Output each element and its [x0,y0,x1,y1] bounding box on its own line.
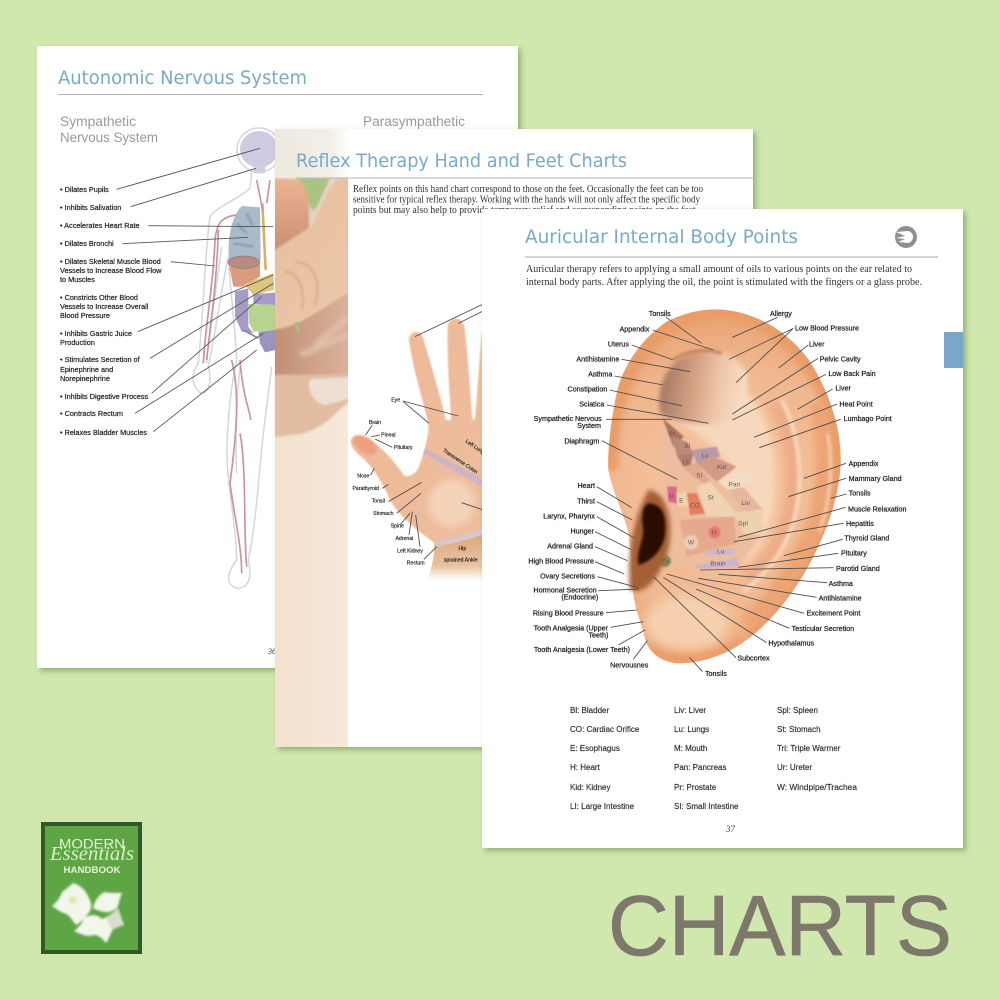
zone labels: Kid [717,464,727,471]
icon: hand in circle [895,226,917,248]
hand labels: Pituitary [394,445,413,451]
ear labels left: Sympathetic Nervous [534,415,602,423]
ear labels right: Liver [835,385,851,393]
lobe lower-edge shade [652,640,743,659]
logo: Modern Essentials Handbook [41,822,142,954]
thumb nail edge [296,322,299,332]
rim band [611,311,838,637]
ear labels right: Mammary Gland [849,475,902,483]
spine [262,203,266,270]
intestines [248,304,275,332]
zone labels: Liv [741,500,751,507]
wrist band [435,523,488,547]
palm highlight [428,480,475,527]
tab: blue section marker [944,332,963,368]
ear labels left: (Endocrine) [561,594,598,602]
arteries and veins [203,180,270,573]
ear shading, clipped to silhouette [611,311,838,659]
legend: abbreviations: H: Heart [570,763,601,772]
legend: abbreviations: Ur: Ureter [777,763,812,772]
panel: Autonomic Nervous System page [37,46,518,668]
body outline [193,128,281,588]
zone labels: SI [696,473,703,480]
legend: abbreviations: Kid: Kidney [570,783,610,792]
legend: abbreviations: Tri: Triple Warmer [777,744,841,753]
callout lines [366,302,488,559]
transverse colon band [423,448,488,490]
stomach [253,293,275,305]
text: sympathetic effects list: to Muscles [60,275,95,284]
text: sympathetic effects list: • Contracts Rectum [60,409,123,418]
subheading: Sympathetic Nervous System [60,114,158,145]
hand labels: sprained Ankle [444,558,478,564]
zone labels: Brain [710,561,726,568]
text: sympathetic effects list: Vessels to Increase Overall [60,302,149,311]
hand labels: Transverse Colon [442,448,479,476]
ear labels right: Pituitary [841,550,867,558]
hand labels: Stomach [373,511,394,517]
zone labels: H [712,529,717,536]
lungs [229,206,261,267]
logo text [49,836,134,875]
page number: 36 [267,647,276,656]
ear labels right: Lumbago Point [844,415,892,423]
hand labels: Brain [369,420,381,426]
zone labels: Bl [684,443,691,450]
ear labels right: Muscle Relaxation [848,505,906,513]
ear labels right: Allergy [770,310,792,318]
illustration: ear chart [528,309,906,678]
legend: abbreviations: M: Mouth [674,744,707,753]
photo strip: thumb pressing hand [265,129,360,747]
text: reflex intro: sensitive for typical reflex therapy. Working with the hands will not only affect the specific body [353,194,700,206]
hand silhouette [351,319,488,557]
subheading: Parasympathetic: Parasympathetic [363,114,465,129]
text: sympathetic effects list: Norepinephrine [60,374,110,383]
zone labels: Pan [728,481,741,488]
ear labels left: Heart [577,482,595,490]
ear labels right: Asthma [829,580,853,588]
hand labels: Left Lung [464,439,485,456]
hand labels: Left Kidney [397,548,423,554]
ear labels left: Larynx, Pharynx [543,512,595,520]
ear labels left: Teeth) [588,631,608,639]
ear labels right: Pelvic Cavity [820,355,861,363]
panel: Auricular Internal Body Points page [482,209,963,848]
thumb [265,178,352,330]
text: sympathetic effects list: Blood Pressure [60,311,110,320]
ear labels left [528,310,671,670]
ear labels right: Testicular Secretion [792,625,854,633]
zone labels: Pr [668,431,676,438]
hand labels [352,398,485,566]
heading: Reflex Therapy Hand and Feet Charts: Reflex Therapy Hand and Feet Charts [296,150,627,172]
liver [229,265,260,287]
hand labels: Nose [357,474,369,480]
text: sympathetic effects list: • Dilates Skeletal Muscle Blood [60,257,161,266]
rear finger [265,178,309,262]
shaded gap under thumb [265,270,360,395]
text: sympathetic effects list: Vessels to Increase Blood Flow [60,266,162,275]
legend: abbreviations: LI: Large Intestine [570,802,635,811]
ear labels left: Tonsils [649,310,671,318]
legend: abbreviations: W: Windpipe/Trachea [777,783,858,792]
subheading: Sympathetic Nervous System: Nervous System [60,130,158,145]
backdrop behind thumb [265,178,355,288]
ear labels left: Hormonal Secretion [533,587,597,595]
ear labels left: System [577,422,601,430]
thumb tip blush [350,431,380,459]
ear labels left: Adrenal Gland [547,543,593,551]
ear labels right: Appendix [849,460,879,468]
ear labels right [705,310,906,678]
ear labels right: Thyroid Gland [844,535,889,543]
text: sympathetic effects list: • Dilates Pupils [60,185,109,194]
page number: 37 [725,824,736,834]
bladder [258,330,275,352]
ear labels left: Hunger [571,527,595,535]
ear labels left: Ovary Secretions [540,572,595,580]
hand labels: Parathyroid [352,486,379,492]
legend: abbreviations: Pr: Prostate [674,783,717,792]
text: sympathetic effects list: Production [60,338,95,347]
ear labels right: Tonsils [705,670,727,678]
ear labels left: Uterus [608,341,629,349]
ear labels right: Low Blood Pressure [795,325,859,333]
legend: abbreviations: St: Stomach [777,725,821,734]
illustration: human body anatomy [193,128,281,588]
text: auricular intro [526,263,922,288]
ear labels left: Diaphragm [564,438,599,446]
text: auricular intro: internal body parts. After applying the oil, the point is stimulated with the fingers or a glass probe. [526,276,922,288]
diaphragm [228,256,260,269]
ear labels right: Excitement Point [807,609,860,617]
zone labels: Lv [701,452,709,459]
zone labels: M [669,494,674,501]
ear labels left: Asthma [588,371,612,379]
text: sympathetic effects list: • Stimulates Secretion of [60,355,141,364]
text: sympathetic effects list [60,185,162,437]
green backdrop [296,178,330,210]
ear labels right: Subcortex [737,655,770,663]
logo text: HANDBOOK [64,865,121,875]
text: reflex intro [353,184,703,216]
legend: abbreviations: Liv: Liver [674,706,706,715]
text: sympathetic effects list: • Accelerates Heart Rate [60,221,140,230]
ear labels left: Sciatica [579,400,604,408]
pancreas [244,273,274,295]
ear labels right: Hepatitis [846,520,874,528]
colon [235,288,253,333]
logo text: MODERN [59,836,125,852]
lower finger [265,374,352,438]
inner helix orange [747,403,824,623]
hand labels: Rectum [407,560,425,566]
zone labels: CO [690,502,700,509]
text: sympathetic effects list: • Constricts Other Blood [60,293,138,302]
panel: Reflex Therapy page [265,129,753,747]
legend: abbreviations: E: Esophagus [570,744,620,753]
ear labels right: Hypothalamus [768,640,814,648]
thumb creases [285,262,318,310]
title: CHARTS: CHARTS [608,879,952,974]
ear labels left: High Blood Pressure [528,557,594,565]
zone labels: Ur [682,459,690,466]
illustration: hand chart [350,302,488,580]
brain [240,131,278,173]
text: sympathetic effects list: Epinephrine and [60,365,113,374]
subheading: Sympathetic Nervous System: Sympathetic [60,114,136,129]
zone labels: E [679,498,684,505]
hand labels: Adrenal [395,536,413,542]
ear labels left: Rising Blood Pressure [533,609,604,617]
zone labels: Lu [717,548,725,555]
trough highlight [743,400,800,592]
legend: abbreviations: Lu: Lungs [674,725,709,734]
scapha fossa [659,349,747,425]
zone labels: St [708,495,714,502]
ear labels right: Heat Point [839,400,873,408]
hand labels: Tonsil [372,498,385,504]
hand labels: Pineal [381,433,396,439]
ear labels right: Parotid Gland [836,565,880,573]
ear labels right: Tonsils [849,490,871,498]
zone labels: W [688,540,695,547]
ear canal shadow halo [629,490,670,591]
ear labels left: Constipation [568,385,607,393]
ear labels left: Tooth Analgesia (Lower Teeth) [534,646,630,654]
zone labels [662,431,751,568]
ear silhouette [608,309,841,663]
callout lines: sympathetic effects [117,148,273,432]
ear labels right: Low Back Pain [828,370,876,378]
text: sympathetic effects list: • Dilates Bronchi [60,239,114,248]
hand labels: Hip [458,546,466,552]
lobe highlight [643,595,730,652]
concha cavity [660,415,761,568]
trough [747,403,793,578]
legend: abbreviations: CO: Cardiac Orifice [570,725,640,734]
ear labels right: Antihistamine [819,595,862,603]
text: reflex intro: points but may also help to provide temporary relief and corresponding points on the feet. [353,205,698,216]
ear canal [638,503,665,565]
fingernail [309,377,352,405]
helix edge stripe [819,433,831,532]
ear labels right: Liver [809,340,825,348]
zone labels: Spl [738,520,748,527]
antihelix light body [667,390,775,567]
legend: abbreviations: Bl: Bladder [570,706,609,715]
wrist [428,532,488,580]
zone labels: Tri [662,558,670,565]
logo text: Essentials [49,843,134,865]
text: sympathetic effects list: • Inhibits Gastric Juice [60,329,132,338]
ear labels left: Thirst [577,497,595,505]
text: sympathetic effects list: • Inhibits Salivation [60,203,121,212]
heading: Auricular Internal Body Points: Auricular Internal Body Points [525,226,798,248]
legend: abbreviations: Pan: Pancreas [674,763,726,772]
ear callout lines [595,317,847,672]
text: reflex intro: Reflex points on this hand chart correspond to those on the feet. Occasionally the feet can be too [353,184,703,195]
ear labels left: Appendix [619,326,650,334]
legend: abbreviations [570,706,858,811]
legend: abbreviations: Spl: Spleen [777,706,818,715]
text: sympathetic effects list: • Inhibits Digestive Process [60,392,148,401]
organ zones [659,418,763,568]
ear labels left: Tooth Analgesia (Upper [534,624,609,632]
text: auricular intro: Auricular therapy refers to applying a small amount of oils to various points on the ear related to [526,263,912,275]
icon: white flowers [52,883,124,943]
hand labels: Eye [391,398,400,404]
text: sympathetic effects list: • Relaxes Bladder Muscles [60,428,147,437]
helix crus shadow [673,351,722,359]
ear labels left: Antihistamine [576,355,619,363]
hand labels: Spine [391,523,404,529]
legend: abbreviations: SI: Small Intestine [674,802,739,811]
heading: Autonomic Nervous System: Autonomic Nervous System [58,67,307,89]
ear labels left: Nervousnes [610,662,649,670]
